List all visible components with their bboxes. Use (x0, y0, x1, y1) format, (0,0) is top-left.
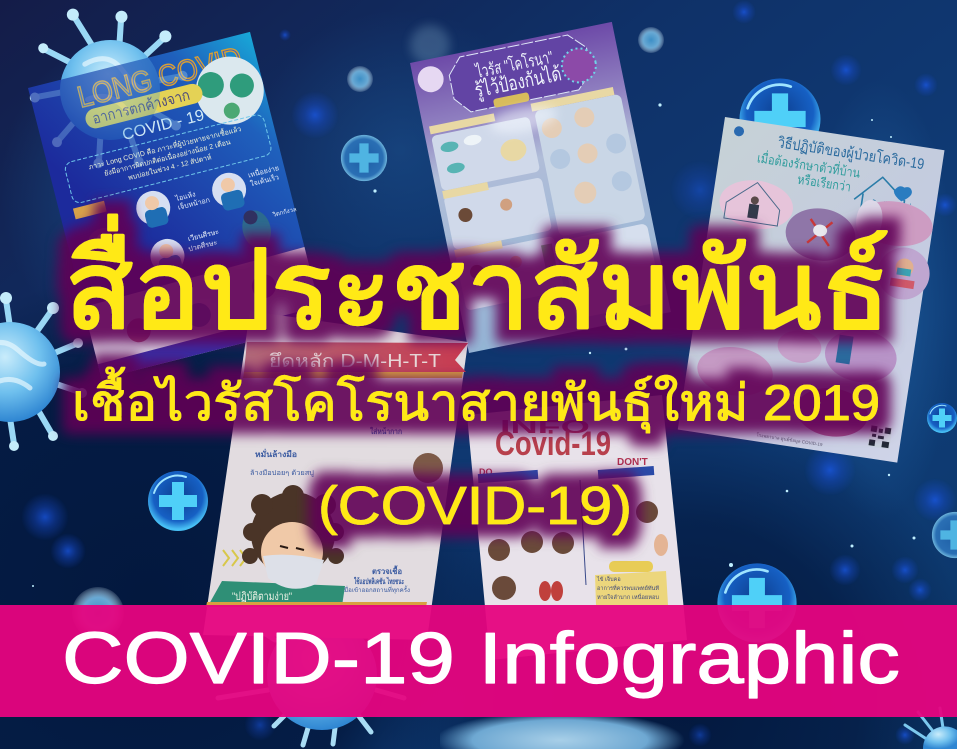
virus ring icon (559, 45, 599, 85)
footer note: โรงพยาบาล ศูนย์ข้อมูล COVID-19 (756, 431, 823, 448)
divider line (580, 480, 586, 585)
yellow chevrons (223, 550, 246, 566)
hand washing panel (531, 86, 646, 237)
title line 3: (COVID-19) (318, 476, 632, 536)
poster: home isolation (678, 117, 948, 463)
mask person blob (874, 244, 933, 303)
orange bottom strip (206, 602, 427, 607)
symptom captions: ใจเต้นเร็ว (249, 172, 280, 188)
INFO heading: INFO (500, 417, 590, 437)
thumbs up (654, 534, 668, 556)
poster heading: วิธีปฏิบัติของผู้ป่วยโควิด-19 (776, 133, 926, 173)
DON'T label (598, 457, 654, 479)
green virus cluster (188, 49, 271, 132)
campaign logo (415, 64, 446, 95)
pink toiletries blob (853, 196, 936, 251)
boy with mask (208, 485, 345, 606)
left panel tags (429, 113, 520, 258)
lower blobs (690, 306, 900, 444)
orange section tag (73, 201, 107, 219)
lungs (539, 581, 563, 601)
plus bubble, upper centre (341, 135, 387, 181)
boy with mask: "ปฏิบัติตามง่าย" (232, 591, 292, 603)
pink house blob (716, 175, 796, 234)
symptom captions: เจ็บหน้าอก (177, 195, 211, 212)
yellow tip panel: อาการที่ควรพบแพทย์ทันที (597, 584, 659, 592)
heart tip (499, 137, 528, 163)
symptom captions (172, 161, 301, 254)
title line 2: เชื้อไวรัสโคโรนาสายพันธุ์ใหม่ 2019 (72, 367, 880, 433)
caption right: เมื่อเข้าออกสถานที่ทุกครั้ง (342, 584, 410, 594)
logo (733, 126, 745, 137)
dashed intro box: พบบ่อยในช่วง 4 - 12 สัปดาห์ (127, 152, 213, 182)
Covid-19 heading: Covid-19 (495, 425, 611, 463)
yellow tip panel: หายใจลำบาก เหนื่อยหอบ (597, 593, 660, 601)
lower right panel (560, 223, 663, 319)
virus, bottom right corner (905, 708, 957, 749)
banner label: COVID-19 Infographic (62, 619, 900, 699)
virus, left edge (0, 292, 87, 451)
poster heading: LONG COVID (74, 41, 245, 115)
symptom captions: เวียนศีรษะ (187, 228, 220, 243)
poster: virus prevention (410, 22, 671, 353)
QR code (867, 424, 892, 449)
hexagon title frame: รู้ไว้ป้องกันได้ (473, 62, 564, 103)
dashed intro box (64, 113, 273, 204)
symptom figures (77, 165, 275, 291)
home isolation label: โฮมไอโซเลชั่น (870, 197, 916, 219)
symptom captions: ไอแห้ง (174, 189, 196, 203)
masks and faces (439, 124, 557, 285)
dashed intro box: ยังมีอาการผิดปกติต่อเนื่องอย่างน้อย 2 เดือน (103, 137, 232, 178)
COVID - 19 label: COVID - 19 (121, 107, 206, 144)
pink banner (0, 605, 957, 717)
dashed intro box: ภาวะ Long COVID คือ ภาวะที่ผู้ป่วยหายจากเชื้อแล้ว (87, 122, 242, 171)
caption left: ล้างมือบ่อยๆ ด้วยสบู่ (250, 469, 314, 477)
caption right: ตรวจเชื้อ (372, 565, 402, 576)
caption left: หมั่นล้างมือ (255, 448, 297, 459)
lower section circles (121, 272, 281, 345)
ribbon heading: ยึดหลัก D-M-H-T-T (269, 351, 441, 371)
top-left virus tint over poster (16, 0, 202, 183)
symptom captions: เหนื่อยง่าย (247, 163, 280, 180)
DON'T label: DON'T (617, 457, 648, 468)
DO label: DO (479, 467, 492, 477)
yellow subheading pill: อาการตกค้างจาก (91, 87, 192, 128)
plus bubble, bottom right (717, 563, 797, 643)
lower pale section (82, 247, 324, 379)
poster: D-M-H-T-T (203, 311, 468, 640)
yellow tip tag (609, 561, 653, 572)
yellow tip panel: ไข้ เจ็บคอ (596, 575, 621, 583)
children faces (488, 501, 658, 600)
home isolation house icon (852, 174, 914, 220)
small star sparks (32, 103, 916, 587)
poster subheading: เมื่อต้องรักษาตัวที่บ้าน (756, 149, 861, 181)
poster subheading line 2: หรือเรียกว่า (796, 172, 852, 195)
caption right: ใช้แอปพลิเคชัน ไทยชนะ (354, 576, 404, 586)
hexagon title frame: ไวรัส "โคโรนา" (473, 47, 555, 82)
bright highlight (488, 101, 559, 138)
poster: Long Covid (28, 31, 325, 379)
plus bubble, right edge (927, 403, 957, 433)
ribbon heading (244, 342, 468, 372)
plus bubble, right edge lower (932, 512, 957, 558)
symptom captions: ปวดศีรษะ (188, 238, 218, 253)
pale blurred virus, bottom (440, 717, 685, 749)
caption right: ใส่หน้ากาก (370, 426, 402, 436)
poster: COVID-19 do and don't (467, 395, 687, 660)
orange strip (243, 372, 463, 378)
head right side (413, 453, 443, 483)
title line 1: สื่อประชาสัมพันธ์ (65, 214, 890, 352)
caption left (250, 448, 314, 477)
caption right (342, 426, 410, 594)
left info panels (431, 116, 565, 311)
plus bubble, lower left (148, 471, 208, 531)
symptom captions: วิตกกังวล (271, 206, 298, 219)
plus bubble, above right poster (740, 78, 820, 160)
hexagon title frame (446, 32, 595, 116)
purple no-contact blob (782, 204, 859, 266)
virus, bottom centre (218, 618, 405, 745)
DO label (478, 467, 538, 483)
yellow tip panel (595, 571, 668, 605)
virus, top left (16, 0, 202, 183)
decorative pale bubbles (72, 27, 664, 639)
